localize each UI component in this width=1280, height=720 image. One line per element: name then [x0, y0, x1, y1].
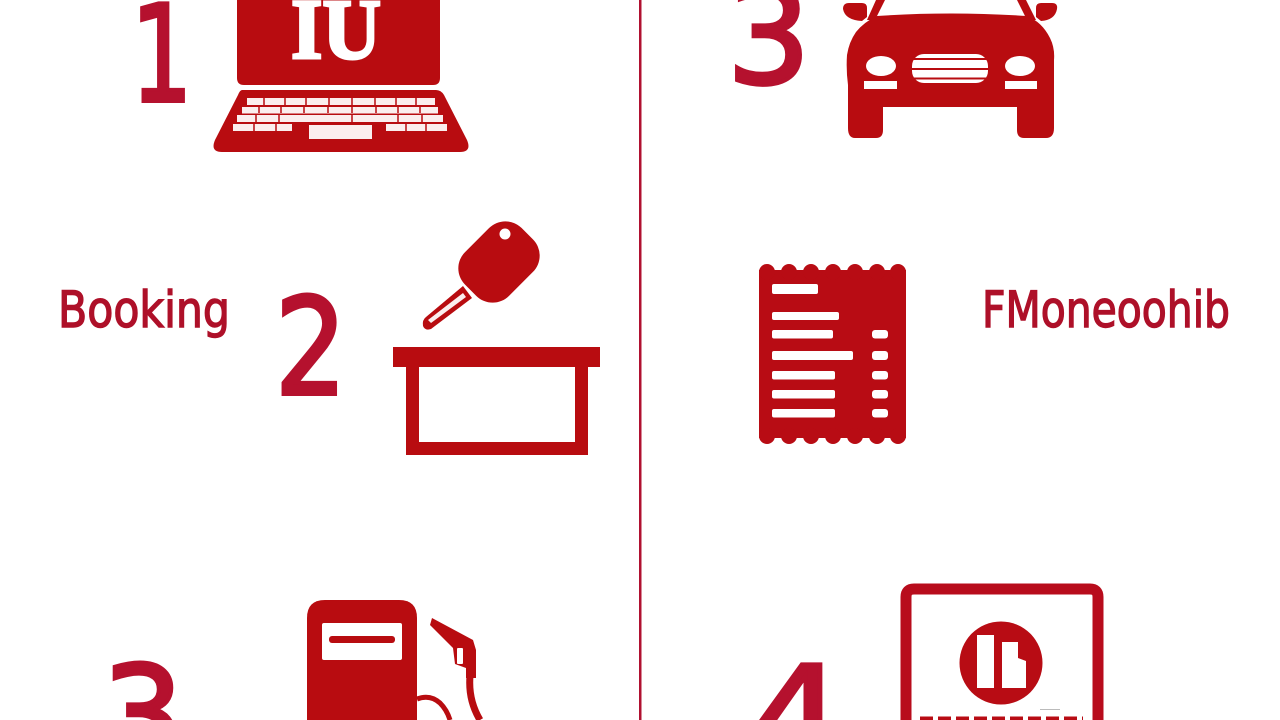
icon: laptop with IU logo [214, 0, 468, 152]
icon: car front view [843, 0, 1057, 138]
icon: framed logo badge [906, 589, 1098, 720]
icon: car key over counter [393, 212, 600, 455]
label: Booking: Booking [58, 281, 230, 339]
icon: fuel pump [307, 600, 480, 720]
label: FMoneoohib: FMoneoohib [982, 281, 1230, 339]
icon: receipt [759, 264, 906, 444]
step number 2: 2 [275, 271, 347, 426]
